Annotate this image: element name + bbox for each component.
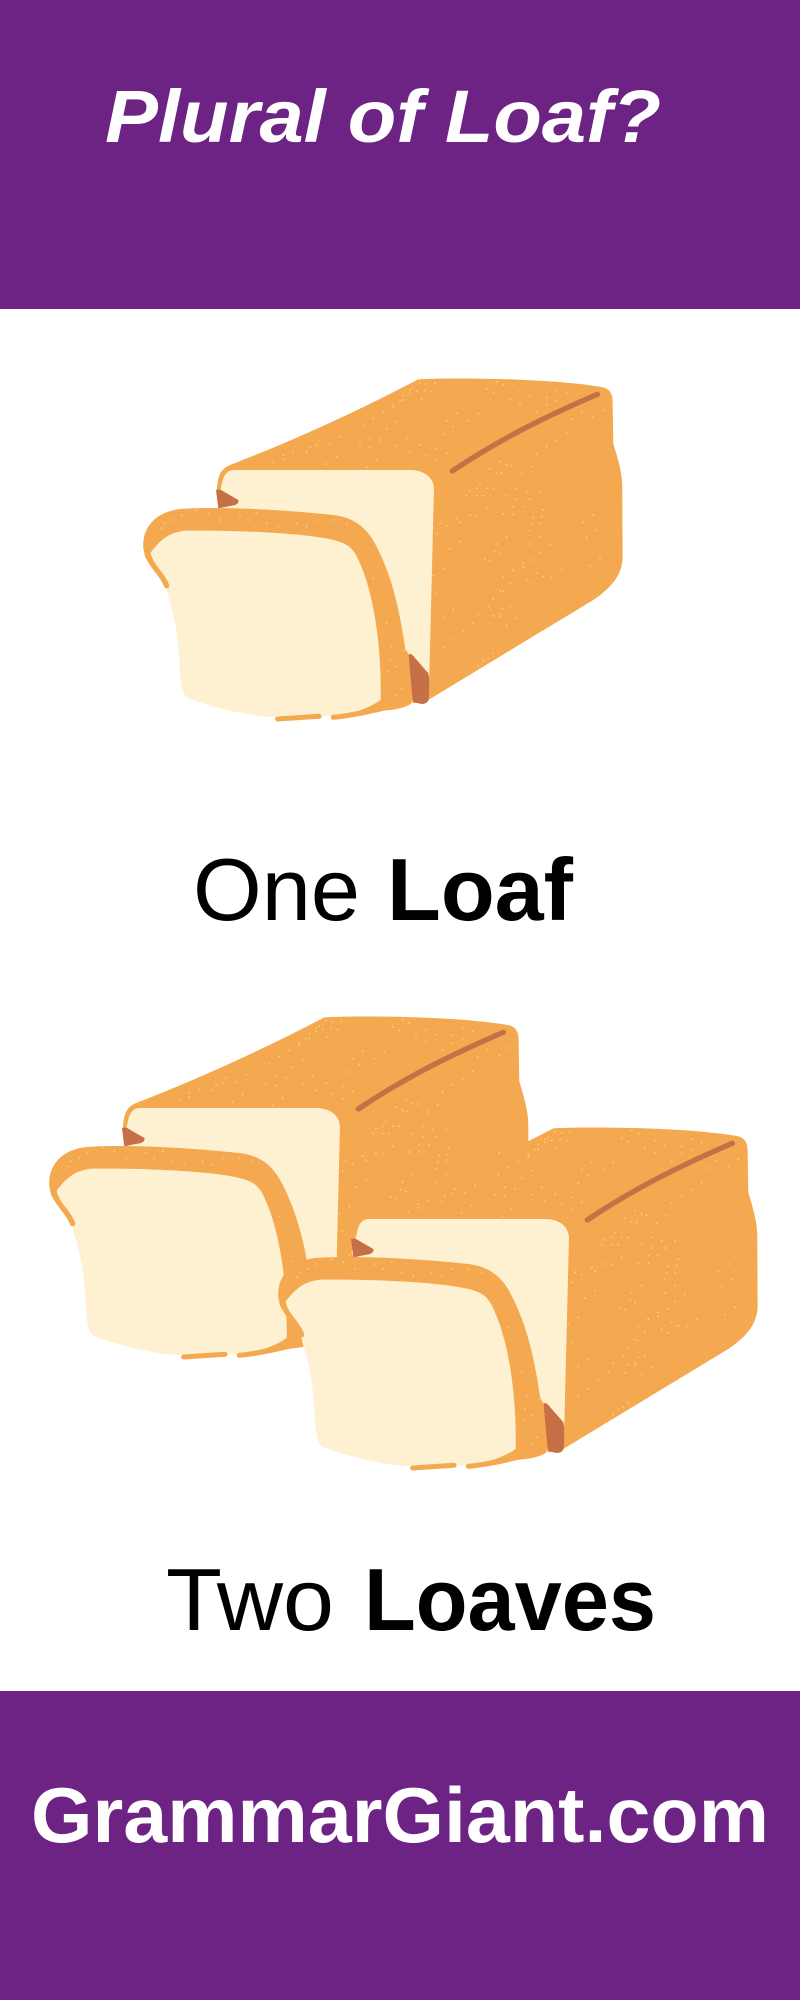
label: two loaves: Loaves <box>364 1550 656 1649</box>
icon: one loaf of bread <box>143 378 623 719</box>
label: one loaf: Loaf <box>387 840 574 939</box>
footer website: GrammarGiant.com <box>31 1771 769 1859</box>
label: one loaf: One <box>193 840 360 939</box>
header band <box>0 0 800 309</box>
title: Plural of Loaf? <box>105 75 661 158</box>
label: one loaf <box>193 840 574 939</box>
label: two loaves: Two <box>166 1550 334 1649</box>
label: two loaves <box>166 1550 656 1649</box>
icon: back loaf of bread <box>49 1016 529 1357</box>
icon: front loaf of bread <box>278 1127 758 1468</box>
footer band <box>0 1691 800 2000</box>
